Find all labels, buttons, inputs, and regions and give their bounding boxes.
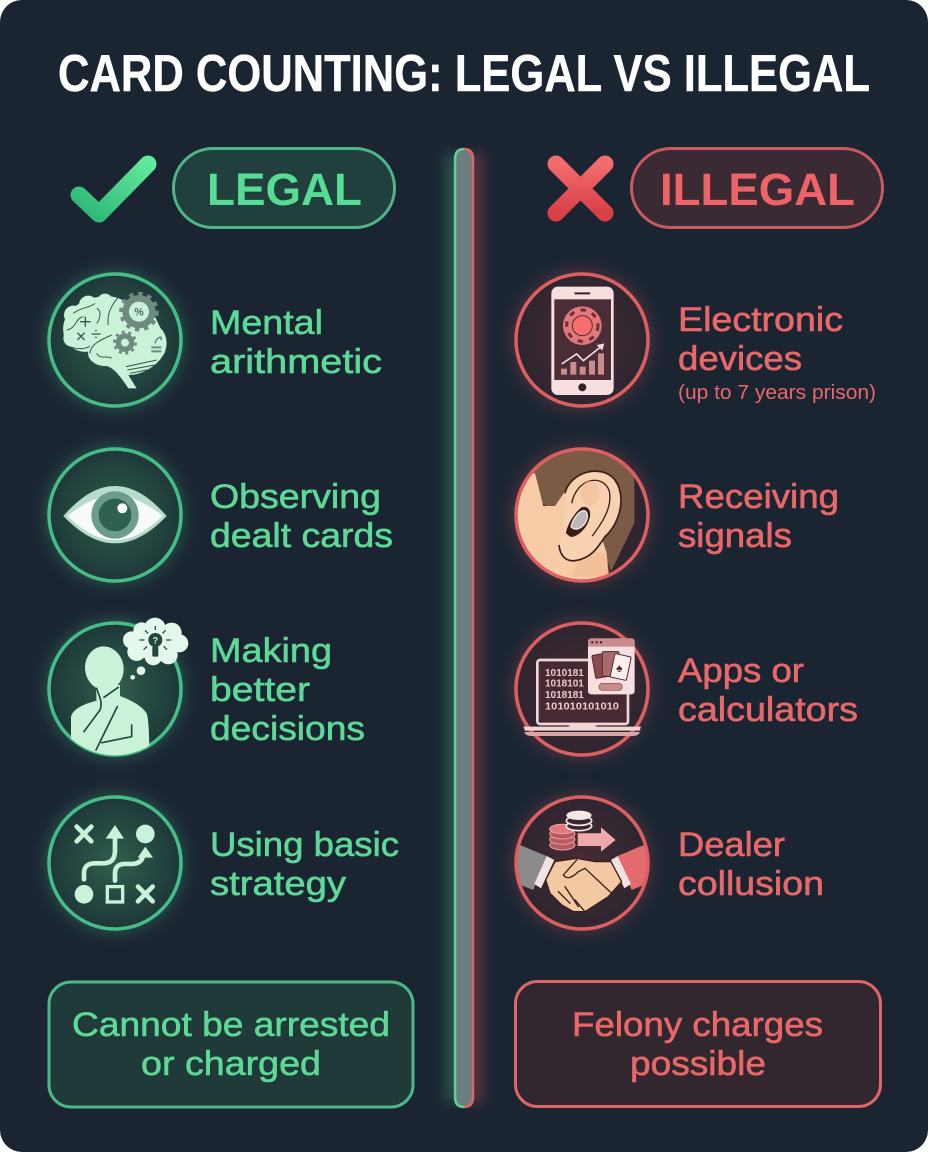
illegal callout: Felony charges	[572, 1006, 823, 1044]
icon: check mark	[79, 164, 148, 214]
icon: brain with gears	[63, 294, 167, 388]
item: mental arithmetic: Mental	[210, 304, 323, 342]
item: receiving signals	[512, 443, 839, 593]
item: observing dealt cards: dealt cards	[210, 517, 393, 555]
icon: eye	[63, 486, 167, 543]
item: receiving signals: Receiving	[678, 478, 839, 516]
thought bubble with bulb: ?	[153, 635, 158, 645]
item: dealer collusion	[512, 794, 824, 932]
icon: laptop with card app window	[523, 638, 641, 736]
icon: phone with chip and chart	[551, 287, 614, 395]
item: making better decisions: better	[210, 671, 310, 709]
legal heading pill: LEGAL	[207, 164, 362, 215]
illegal heading pill	[632, 148, 882, 228]
illegal heading pill: ILLEGAL	[660, 164, 855, 215]
item: electronic devices: Electronic	[678, 301, 843, 339]
panel: legal	[46, 148, 413, 1107]
illegal callout: possible	[630, 1045, 766, 1083]
icon: red X	[556, 164, 605, 213]
legal callout: or charged	[141, 1045, 321, 1083]
icon: ear with earpiece	[518, 450, 634, 580]
icon: laptop with card app window: 1018181	[545, 690, 584, 701]
item: electronic devices	[513, 271, 876, 409]
icon: brain with gears: %	[134, 307, 144, 319]
item: making better decisions: Making	[210, 632, 332, 670]
item: receiving signals: signals	[678, 517, 792, 555]
item: apps or calculators: calculators	[678, 691, 858, 729]
legal callout	[49, 982, 413, 1107]
item: using basic strategy: Using basic	[210, 826, 399, 864]
item: using basic strategy	[46, 794, 399, 932]
icon: strategy diagram	[75, 825, 155, 904]
icon: laptop with card app window: 1010181	[545, 668, 584, 679]
icon: laptop with card app window: 1018101	[545, 679, 584, 690]
item: dealer collusion: Dealer	[678, 826, 785, 864]
illegal callout	[516, 982, 880, 1106]
item: observing dealt cards: Observing	[210, 478, 381, 516]
item: mental arithmetic: arithmetic	[210, 343, 382, 381]
item: electronic devices: (up to 7 years prison)	[678, 382, 876, 404]
item: mental arithmetic	[46, 271, 382, 409]
item: electronic devices: devices	[678, 340, 802, 378]
item: apps or calculators: Apps or	[678, 652, 804, 690]
icon: laptop with card app window: 101010101010	[545, 701, 619, 712]
icon: thinking person	[71, 618, 188, 757]
legal heading pill	[174, 148, 394, 228]
panel: illegal	[512, 148, 882, 1106]
center divider	[446, 148, 482, 1108]
item: making better decisions: decisions	[210, 710, 365, 748]
item: apps or calculators	[513, 620, 858, 758]
icon: handshake with chips	[512, 811, 652, 912]
icon: laptop with card app window: ♠	[616, 661, 623, 675]
item: using basic strategy: strategy	[210, 865, 346, 903]
item: observing dealt cards	[46, 446, 393, 584]
item: making better decisions	[46, 618, 365, 758]
item: dealer collusion: collusion	[678, 865, 824, 903]
legal callout: Cannot be arrested	[72, 1006, 390, 1044]
